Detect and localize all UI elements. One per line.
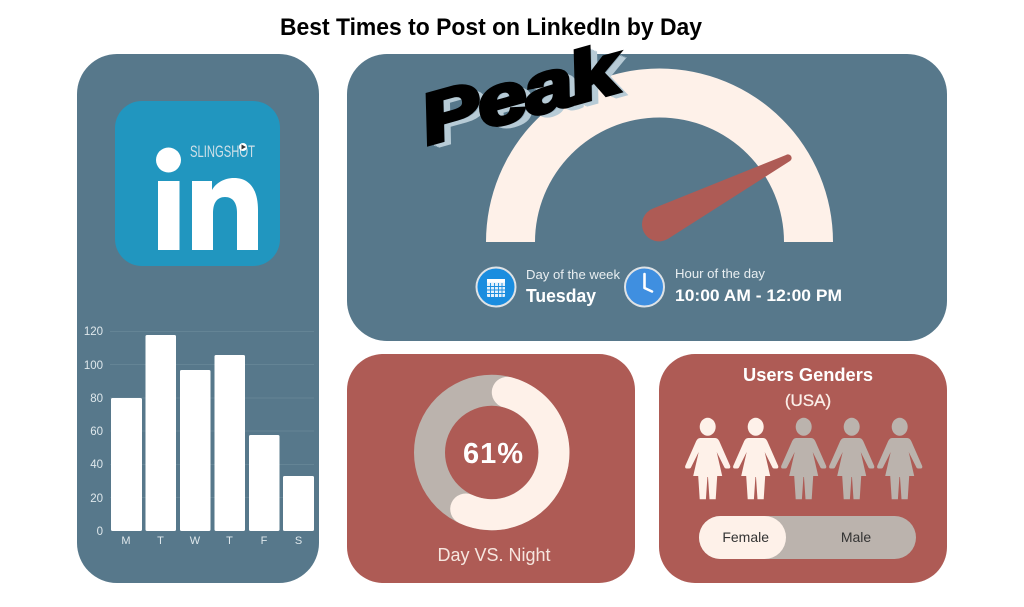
bar chart: 100 bbox=[84, 360, 103, 372]
bar chart: 20 bbox=[90, 493, 103, 505]
bar chart: T bbox=[226, 535, 233, 547]
text: hour of the day bbox=[675, 266, 842, 305]
bar chart: 0 bbox=[97, 526, 103, 538]
toggle: female and male: Male bbox=[841, 529, 871, 545]
toggle: female and male: Female bbox=[722, 529, 769, 545]
icon: linkedin logo bbox=[115, 101, 280, 266]
peak label: Peak bbox=[411, 30, 626, 159]
bar chart: 60 bbox=[90, 426, 103, 438]
people icons bbox=[685, 418, 922, 499]
text: hour of the day: 10:00 AM - 12:00 PM bbox=[675, 286, 842, 305]
toggle: female and male bbox=[699, 516, 916, 559]
heading: Users Genders bbox=[743, 365, 873, 385]
donut value: 61% bbox=[463, 438, 524, 470]
bar chart: W bbox=[190, 535, 201, 547]
bar chart bbox=[84, 326, 314, 547]
bar chart: 40 bbox=[90, 459, 103, 471]
bar chart: 80 bbox=[90, 393, 103, 405]
heading bbox=[743, 365, 873, 410]
panel: users genders bbox=[659, 354, 947, 583]
title: Best Times to Post on LinkedIn by Day bbox=[280, 14, 703, 41]
icon: calendar bbox=[476, 268, 516, 306]
gauge needle bbox=[642, 154, 792, 241]
text: day of the week: Day of the week bbox=[526, 267, 621, 282]
panel: peak gauge bbox=[347, 54, 947, 341]
panel: day vs night bbox=[347, 354, 635, 583]
bar chart: F bbox=[261, 535, 268, 547]
watermark: slingshot bbox=[190, 142, 255, 161]
icon: clock bbox=[625, 268, 664, 306]
bar chart: M bbox=[121, 535, 131, 547]
heading: (USA) bbox=[785, 391, 831, 410]
bar chart: T bbox=[157, 535, 164, 547]
watermark: slingshot: SLINGSHOT bbox=[190, 142, 255, 161]
text: hour of the day: Hour of the day bbox=[675, 266, 766, 281]
donut caption: Day VS. Night bbox=[438, 545, 550, 565]
text: day of the week: Tuesday bbox=[526, 286, 596, 306]
donut chart bbox=[430, 390, 554, 515]
bar chart: 120 bbox=[84, 326, 103, 338]
panel: linkedin and bar chart bbox=[77, 54, 319, 583]
text: day of the week bbox=[526, 267, 621, 306]
gauge arc bbox=[486, 68, 833, 242]
bar chart: S bbox=[295, 535, 302, 547]
